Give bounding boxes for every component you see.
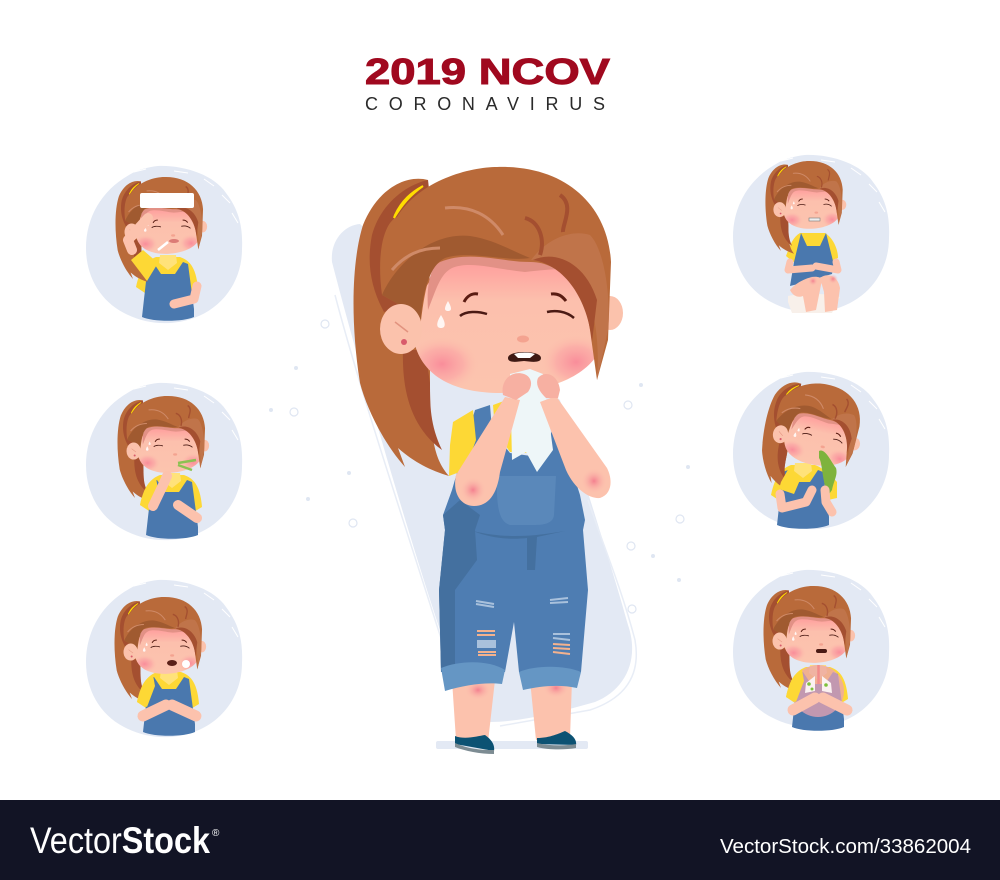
forehead bandage xyxy=(140,193,194,208)
body xyxy=(136,255,198,321)
head xyxy=(763,586,855,691)
lungs xyxy=(805,665,832,693)
arms xyxy=(143,705,196,716)
registered mark: ® xyxy=(212,828,220,839)
knee redness xyxy=(808,274,838,286)
raised sleeve xyxy=(131,250,158,281)
mouth xyxy=(809,218,820,221)
head xyxy=(117,396,209,501)
footer bar xyxy=(0,800,1000,880)
head xyxy=(114,597,206,702)
symptom: vomiting xyxy=(733,372,889,529)
legs xyxy=(790,275,840,312)
mouth xyxy=(167,660,177,666)
symptom: cough xyxy=(86,383,242,540)
tissue xyxy=(510,369,553,472)
watermark logo: VectorStock xyxy=(30,820,210,861)
cuffs xyxy=(441,662,581,691)
vomit xyxy=(819,451,837,497)
knee redness xyxy=(465,678,569,700)
breath puff xyxy=(182,660,190,668)
title: 2019 NCOV xyxy=(365,51,610,92)
overalls shading xyxy=(439,500,565,672)
floor shadow xyxy=(436,741,588,749)
arms xyxy=(788,262,838,270)
head xyxy=(354,167,623,476)
sleeve xyxy=(140,478,158,510)
forearm and hand xyxy=(174,286,197,304)
symptom: lung infection xyxy=(733,570,889,731)
arms xyxy=(780,490,832,512)
arms xyxy=(128,218,148,250)
ripped patches xyxy=(476,598,570,655)
yellow shirt xyxy=(449,398,528,476)
overalls xyxy=(439,405,588,672)
right sleeve xyxy=(826,470,837,500)
bib pocket xyxy=(497,476,556,525)
backdrop xyxy=(86,166,242,323)
sleeve xyxy=(786,670,804,702)
hands xyxy=(503,373,560,400)
mouth xyxy=(816,649,827,653)
backdrop xyxy=(86,580,242,737)
symptom: fever xyxy=(86,166,242,323)
arms xyxy=(455,396,611,506)
legs xyxy=(452,680,572,742)
image id: VectorStock.com/33862004 xyxy=(720,836,971,858)
cough spray xyxy=(178,460,196,470)
symptom: shortness of breath xyxy=(86,580,242,737)
sleeve xyxy=(137,675,155,707)
subtitle: CORONAVIRUS xyxy=(365,94,605,114)
body xyxy=(137,670,199,736)
overalls xyxy=(790,233,834,286)
main girl sneezing xyxy=(354,167,623,754)
head xyxy=(115,177,207,282)
backdrop xyxy=(733,155,889,312)
body xyxy=(786,233,838,262)
body xyxy=(771,463,833,529)
body xyxy=(140,473,202,539)
left sleeve xyxy=(779,466,800,494)
backdrop xyxy=(733,570,889,727)
chest glow xyxy=(792,665,844,717)
thermometer xyxy=(158,242,168,250)
elbow redness xyxy=(460,468,607,503)
central backdrop shape xyxy=(332,224,636,726)
decorative floating dots xyxy=(269,320,690,613)
mouth xyxy=(169,239,179,243)
arms xyxy=(793,698,847,710)
head xyxy=(765,161,846,254)
body xyxy=(786,665,848,731)
mouth xyxy=(508,352,541,362)
backdrop xyxy=(733,372,889,529)
symptom: diarrhea xyxy=(733,155,889,313)
arms xyxy=(153,476,197,518)
backdrop xyxy=(86,383,242,540)
toilet xyxy=(788,294,840,313)
shoes xyxy=(455,731,576,754)
head xyxy=(753,374,871,503)
